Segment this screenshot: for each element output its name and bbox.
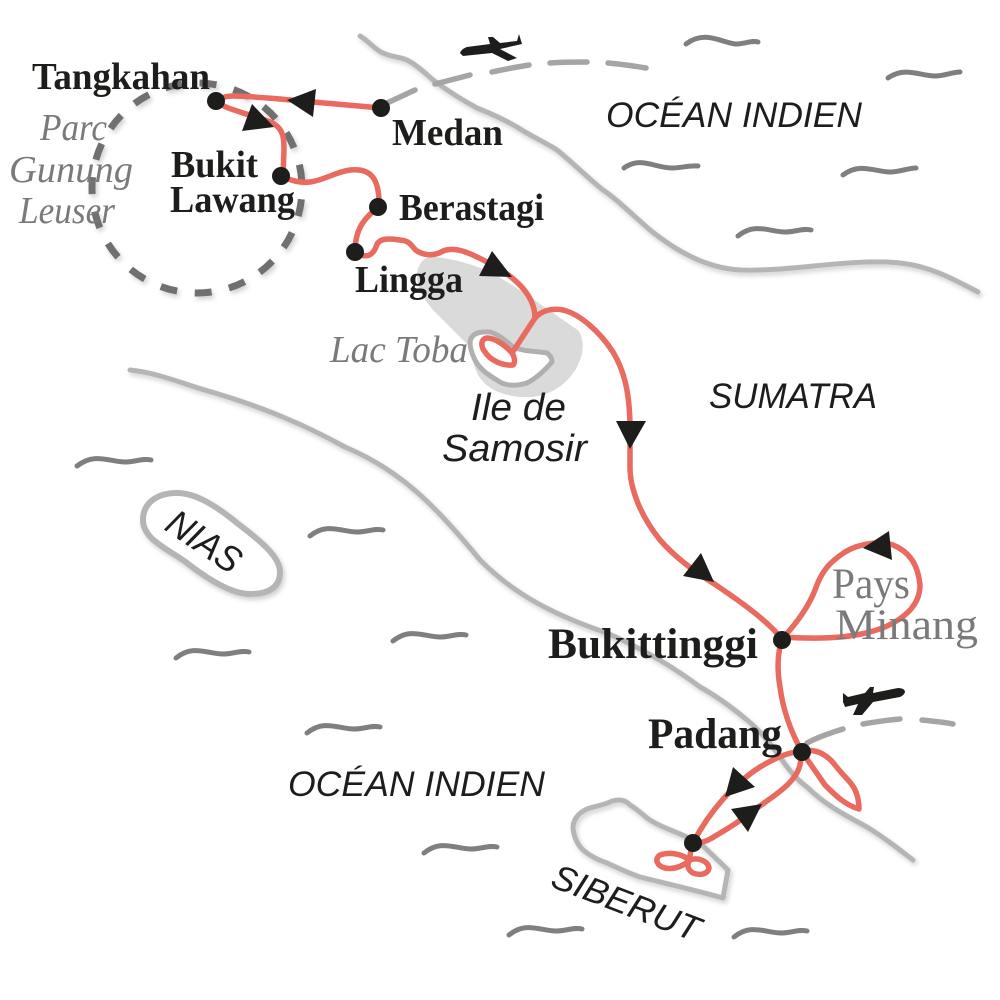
label: Lawang: Lawang	[170, 179, 295, 221]
label: ocean south: OCÉAN INDIEN	[288, 765, 546, 804]
label: Padang: Padang	[648, 711, 782, 758]
label: Leuser: Leuser	[18, 190, 115, 232]
label: Gunung: Gunung	[9, 149, 133, 191]
label: Minang: Minang	[835, 602, 978, 649]
route	[216, 96, 920, 874]
park circle	[92, 83, 302, 293]
label: Lingga: Lingga	[355, 259, 463, 301]
label: Pays: Pays	[832, 561, 910, 608]
label: Tangkahan: Tangkahan	[32, 56, 210, 98]
label: Lac Toba: Lac Toba	[329, 329, 468, 371]
label: Medan: Medan	[392, 112, 503, 154]
label: Bukittinggi: Bukittinggi	[548, 621, 758, 668]
label: Nias: NIAS	[159, 502, 250, 582]
label: Sumatra: SUMATRA	[709, 377, 877, 416]
lake toba shadow	[417, 257, 583, 397]
flight routes	[387, 62, 953, 743]
sumatra south coast	[130, 370, 913, 860]
sumatra north coast	[360, 36, 978, 292]
label: Berastagi: Berastagi	[399, 187, 544, 229]
planes	[460, 34, 905, 715]
label: Bukit: Bukit	[171, 144, 258, 186]
siberut island	[573, 800, 728, 898]
label: Samosir: Samosir	[442, 428, 588, 470]
waves	[77, 37, 960, 937]
arrows	[242, 89, 892, 832]
label: Parc: Parc	[39, 107, 107, 149]
label: Ile de: Ile de	[471, 387, 566, 429]
label: Siberut: SIBERUT	[546, 857, 708, 950]
stops	[207, 92, 811, 852]
nias island	[143, 493, 280, 594]
lake toba	[470, 332, 552, 385]
label: ocean north: OCÉAN INDIEN	[606, 96, 863, 135]
